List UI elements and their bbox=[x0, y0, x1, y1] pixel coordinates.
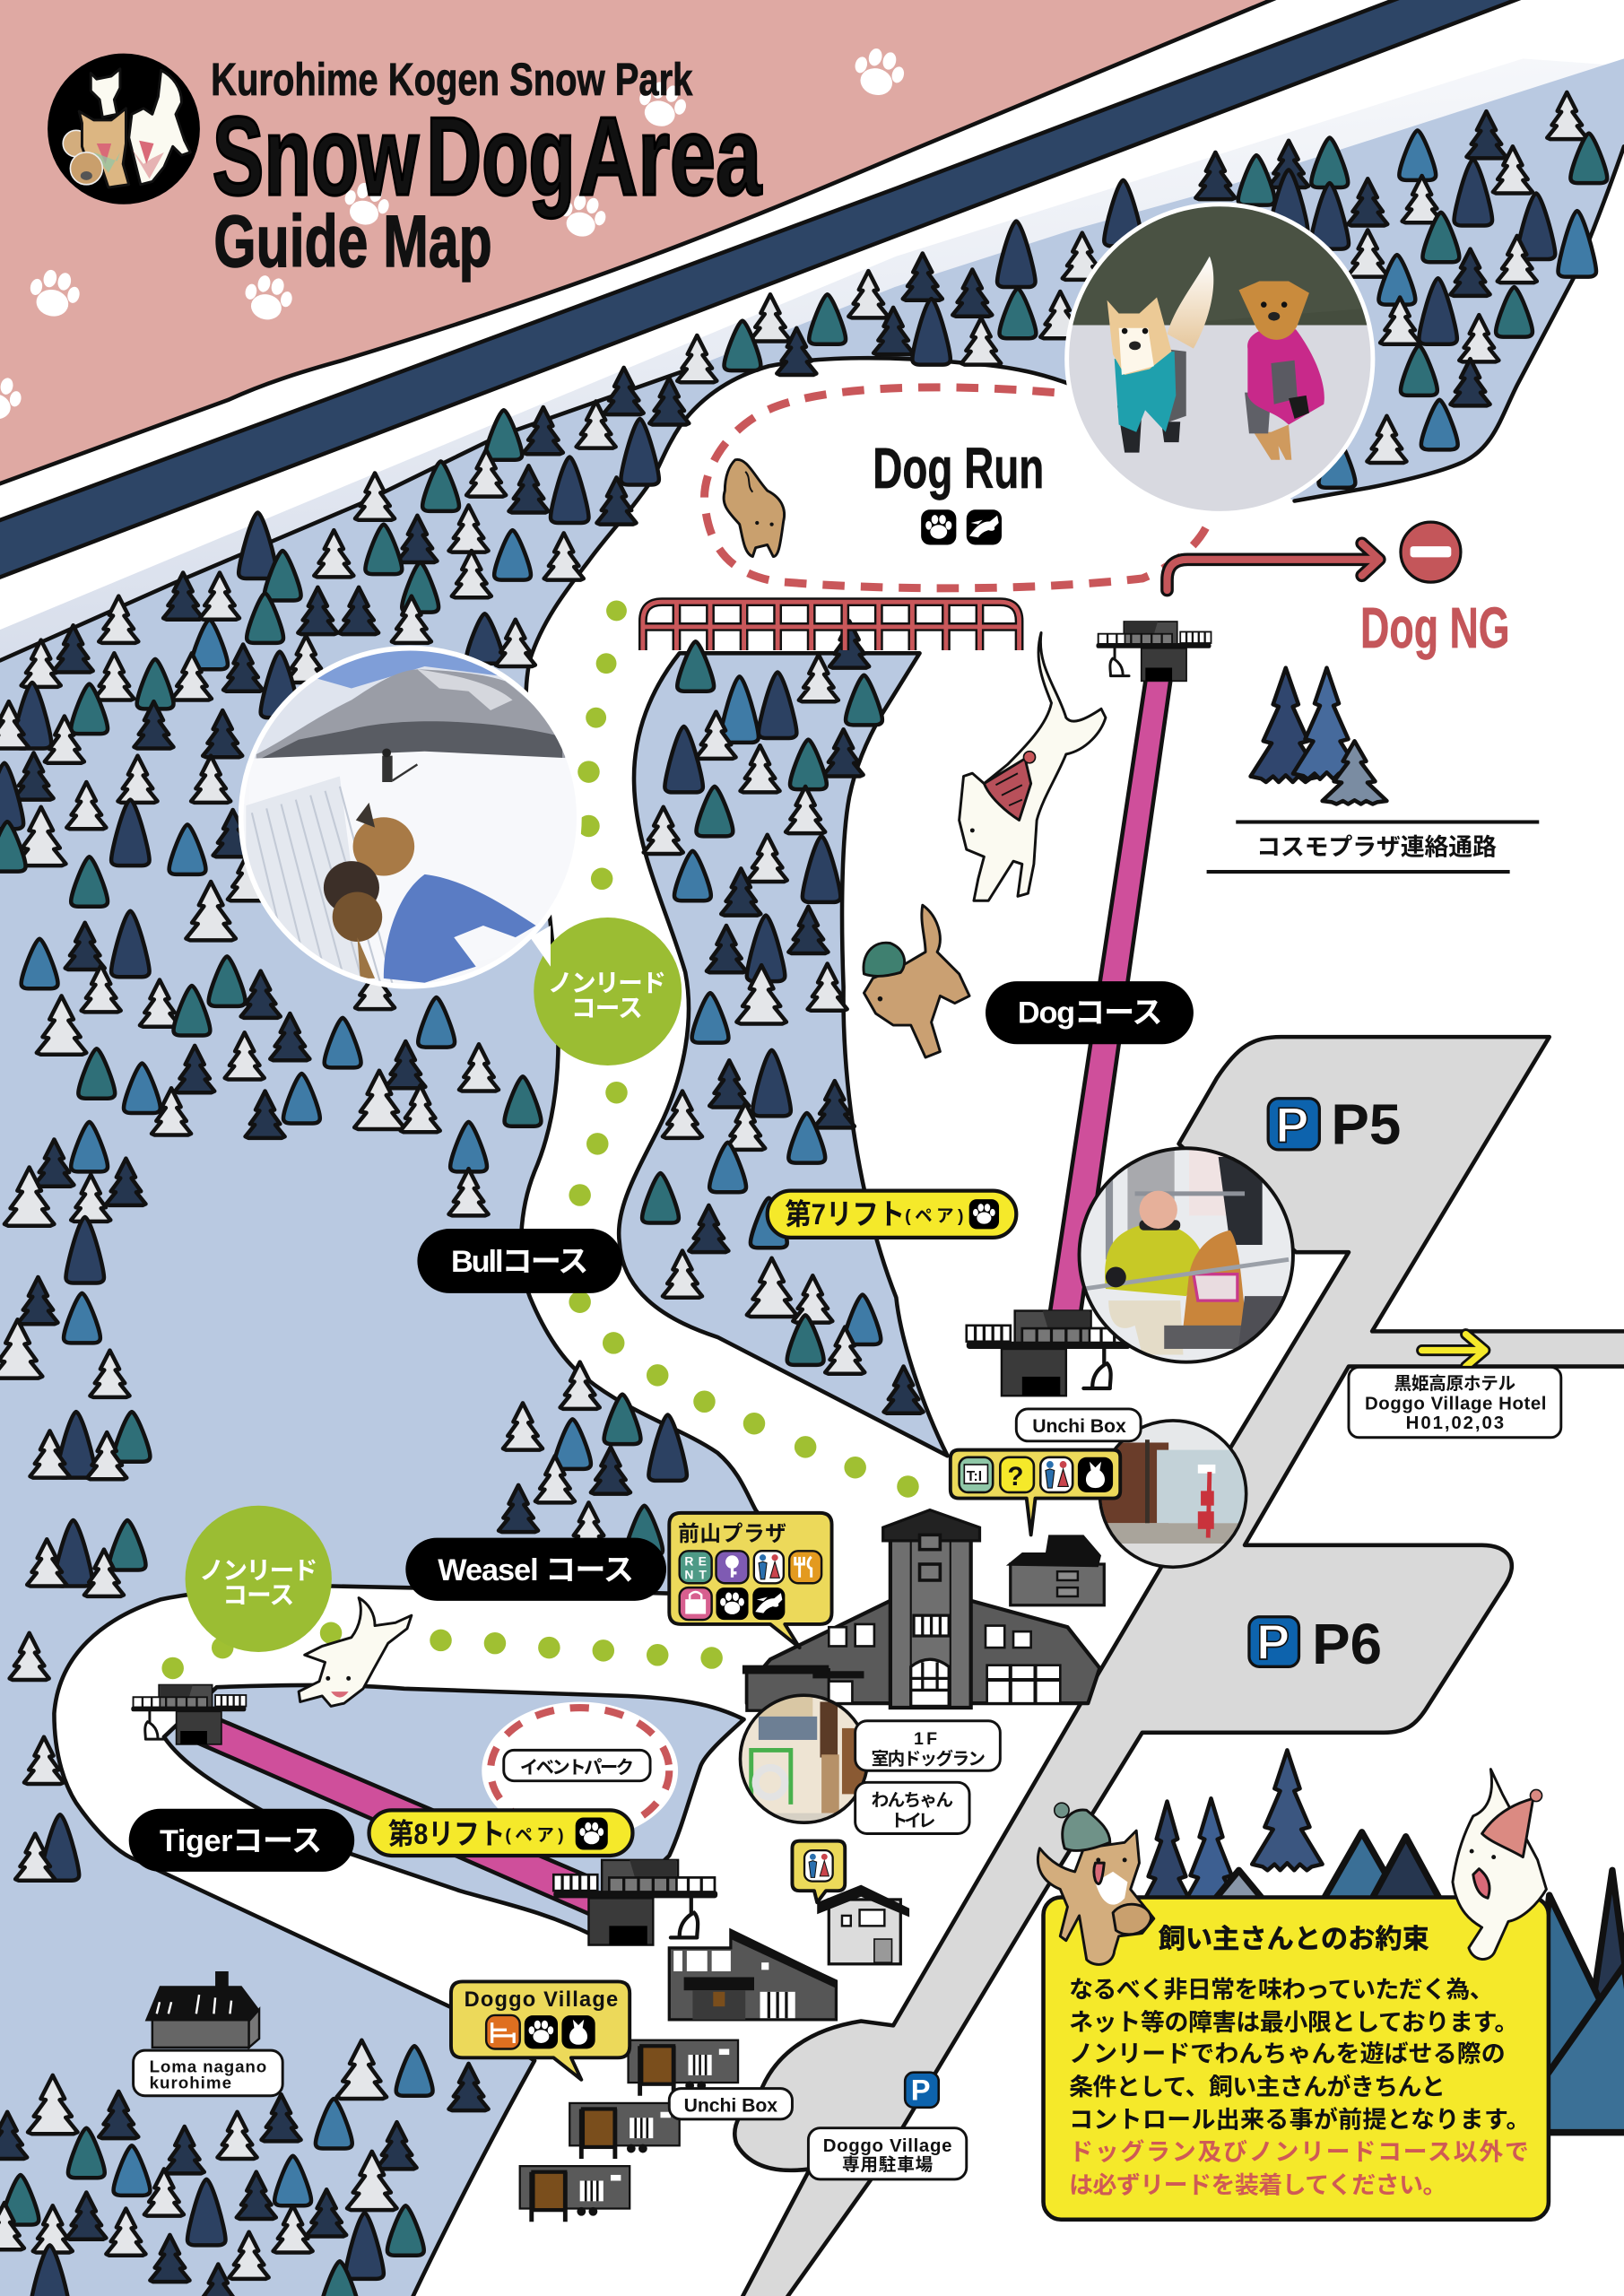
panel body text: ドッグラン及びノンリードコース以外で bbox=[1069, 2138, 1529, 2166]
building: restroom house bbox=[817, 1885, 909, 1964]
label: P6 parking bbox=[1249, 1613, 1382, 1676]
non-leash badge: Bull course bbox=[534, 918, 682, 1065]
building: lodge bbox=[669, 1930, 838, 2020]
label: lift 8: 第8リフト bbox=[388, 1817, 505, 1850]
panel heading: 飼い主さんとのお約束 bbox=[1159, 1924, 1429, 1954]
callout: ticket and info icons: T:I bbox=[967, 1469, 982, 1484]
panel body text: コントロール出来る事が前提となります。 bbox=[1069, 2106, 1530, 2134]
label: 1F indoor dog run: 室内ドッグラン bbox=[872, 1749, 986, 1770]
building: small house with Unchi Box bbox=[1006, 1535, 1104, 1605]
dog run dashed area bbox=[704, 387, 1210, 588]
label: lift 7 bbox=[768, 1191, 1016, 1238]
non-leash badge: Bull course: コース bbox=[571, 994, 643, 1022]
photo: unchi box building bbox=[1099, 1421, 1247, 1567]
bridge bbox=[643, 602, 1020, 650]
dog: brown puppy in dog run bbox=[724, 459, 785, 557]
label: Weasel course: Weasel コース bbox=[438, 1553, 634, 1587]
forest top edge line bbox=[0, 370, 685, 660]
icon: small parking sign: P bbox=[911, 2074, 931, 2107]
non-leash badge: Weasel course bbox=[186, 1506, 332, 1652]
label: Doggo Village Hotel: 黒姫高原ホテル bbox=[1394, 1373, 1515, 1394]
label: Tiger course: Tigerコース bbox=[160, 1824, 322, 1858]
station: top of Dog lift bbox=[1096, 622, 1211, 681]
label: Bull course: Bullコース bbox=[451, 1245, 588, 1279]
parking roads P5 and P6 bbox=[734, 1037, 1624, 2296]
heading: Dog NG: Dog NG bbox=[1360, 596, 1510, 660]
panel body text: ノンリードでわんちゃんを遊ばせる際の bbox=[1069, 2040, 1506, 2067]
label: Unchi Box near lift: Unchi Box bbox=[1032, 1416, 1126, 1437]
callout: ticket and info icons: ? bbox=[1008, 1462, 1023, 1492]
label: Tiger course bbox=[129, 1809, 354, 1872]
forest: middle trees between courses bbox=[642, 621, 924, 1413]
lift: course 8 pink line bbox=[197, 1717, 595, 1916]
snow gradient above the forest bbox=[0, 58, 1624, 660]
logo: round badge with three dogs bbox=[48, 54, 200, 204]
icons: paw and running dog bbox=[921, 509, 1002, 544]
title line: Guide Map: Guide Map bbox=[213, 201, 492, 283]
dog: white dog running near Weasel course bbox=[299, 1598, 412, 1706]
label: Loma nagano kurohime: Loma nagano bbox=[150, 2057, 266, 2076]
label: P6 parking: P6 bbox=[1312, 1613, 1382, 1676]
dog: white dog with pink hat bbox=[1453, 1770, 1546, 1960]
station: bottom of Dog lift bbox=[967, 1311, 1131, 1396]
title word: Dog: Dog bbox=[426, 95, 576, 219]
label: lift 8: (ペア) bbox=[505, 1826, 564, 1846]
building: Maeyama Plaza bbox=[743, 1510, 1099, 1710]
panel: promise with owners bbox=[1044, 1898, 1549, 2220]
lift: Dog course pink line bbox=[1050, 674, 1171, 1312]
building: Loma nagano bbox=[145, 1971, 259, 2048]
arrow to Dog NG bbox=[1168, 544, 1379, 590]
dog: brown dog with teal hat bbox=[864, 905, 969, 1057]
connection path label: Cosmo Plaza bbox=[1207, 820, 1539, 874]
icon: three spruce trees bbox=[1251, 668, 1386, 804]
label: lift 7: 第7リフト bbox=[785, 1197, 905, 1231]
label: dog toilet bbox=[855, 1782, 969, 1833]
callout: Maeyama Plaza facilities: NT bbox=[684, 1567, 707, 1581]
label: Dog course: Dogコース bbox=[1018, 996, 1163, 1031]
non-leash badge: Bull course: ノンリード bbox=[548, 970, 666, 997]
label: Loma nagano kurohime: kurohime bbox=[150, 2074, 231, 2092]
icon: no entry sign bbox=[1401, 522, 1461, 582]
panel body text: なるべく非日常を味わっていただく為、 bbox=[1069, 1976, 1494, 2003]
area: island inside Tiger and Weasel courses bbox=[164, 1685, 744, 1934]
non-leash badge: Weasel course: ノンリード bbox=[199, 1556, 317, 1584]
label: Doggo Village parking bbox=[808, 2128, 967, 2179]
label: Unchi Box near cabins: Unchi Box bbox=[684, 2096, 777, 2117]
non-leash badge: Weasel course: コース bbox=[222, 1581, 294, 1609]
panel: pink header area bbox=[0, 0, 1289, 486]
forest: top right trees bbox=[677, 92, 1607, 488]
label: 1F indoor dog run bbox=[855, 1721, 1000, 1770]
event park dashed area bbox=[482, 1702, 678, 1839]
panel body text: 条件として、飼い主さんがきちんと bbox=[1069, 2073, 1446, 2100]
callout: Maeyama Plaza facilities: RE bbox=[684, 1554, 707, 1569]
label: lift 7: (ペア) bbox=[905, 1206, 964, 1226]
label: Weasel course bbox=[405, 1538, 666, 1601]
callout: ticket and info icons bbox=[951, 1450, 1120, 1535]
dog: shiba with green hat bbox=[1038, 1803, 1154, 1964]
panel body text: は必ずリードを装着してください。 bbox=[1069, 2171, 1446, 2198]
label: Unchi Box near cabins bbox=[669, 2089, 792, 2119]
label: Unchi Box near lift bbox=[1016, 1409, 1141, 1441]
station: top of lift 8 bbox=[131, 1685, 246, 1744]
forest: big spruce and cone trees behind the promise panel bbox=[1138, 1750, 1624, 2133]
navy ridge band bbox=[0, 0, 1534, 580]
buildings: Doggo Village cabins bbox=[520, 2040, 738, 2222]
callout: Doggo Village bbox=[451, 1981, 630, 2080]
photo: man and shiba on chairlift bbox=[1076, 1143, 1296, 1370]
callout: Doggo Village: Doggo Village bbox=[465, 1988, 618, 2012]
connection path label: Cosmo Plaza: コスモプラザ連絡通路 bbox=[1256, 834, 1497, 861]
label: dog toilet: トイレ bbox=[890, 1811, 935, 1831]
label: dog toilet: わんちゃん bbox=[872, 1790, 953, 1810]
title block bbox=[211, 54, 762, 283]
title word: Area: Area bbox=[578, 95, 762, 219]
label: event park bbox=[504, 1750, 650, 1781]
label: P5 parking: P5 bbox=[1331, 1092, 1401, 1156]
photo: two dogs running in coats bbox=[1062, 197, 1384, 520]
label: P6 parking: P bbox=[1256, 1614, 1290, 1670]
photo: collie on groomed snow trail bbox=[234, 645, 586, 996]
title line: park name: Kurohime Kogen Snow Park bbox=[211, 54, 693, 105]
heading: Dog Run: Dog Run bbox=[873, 437, 1044, 500]
arrow: yellow to hotel bbox=[1422, 1335, 1485, 1367]
label: Doggo Village Hotel: H01,02,03 bbox=[1406, 1413, 1504, 1433]
area: forest between Bull course and Dog course bbox=[619, 653, 948, 1456]
dog: white dog with pink hat bbox=[960, 632, 1106, 900]
callout: Maeyama Plaza facilities bbox=[669, 1513, 832, 1648]
non-leash course dots bbox=[161, 601, 919, 1679]
label: Bull course bbox=[417, 1229, 622, 1293]
label: lift 8 bbox=[369, 1810, 632, 1856]
label: P5 parking bbox=[1268, 1092, 1401, 1156]
forest: bottom left trees bbox=[0, 2040, 489, 2296]
icon: small parking sign bbox=[905, 2073, 939, 2108]
label: Doggo Village Hotel: Doggo Village Hotel bbox=[1365, 1395, 1546, 1414]
title word: Snow: Snow bbox=[213, 95, 419, 219]
station: bottom of lift 8 bbox=[553, 1860, 717, 1945]
label: 1F indoor dog run: 1F bbox=[914, 1729, 937, 1749]
panel body text: ネット等の障害は最小限としております。 bbox=[1069, 2009, 1518, 2036]
forest: main left trees bbox=[0, 368, 689, 1881]
label: Doggo Village Hotel bbox=[1349, 1367, 1561, 1438]
label: Doggo Village parking: 専用駐車場 bbox=[842, 2154, 933, 2175]
event park dashed area: イベントパーク bbox=[520, 1758, 634, 1779]
label: Loma nagano kurohime bbox=[134, 2050, 282, 2096]
label: Doggo Village parking: Doggo Village bbox=[823, 2136, 951, 2156]
callout: restroom icon bbox=[792, 1841, 845, 1902]
paw prints on pink header bbox=[0, 44, 908, 423]
label: Dog course bbox=[986, 981, 1194, 1044]
callout: Maeyama Plaza facilities: 前山プラザ bbox=[678, 1522, 786, 1546]
panel body text bbox=[1069, 1976, 1530, 2198]
label: P5 parking: P bbox=[1275, 1098, 1308, 1153]
photo: indoor dog run bbox=[740, 1694, 872, 1826]
